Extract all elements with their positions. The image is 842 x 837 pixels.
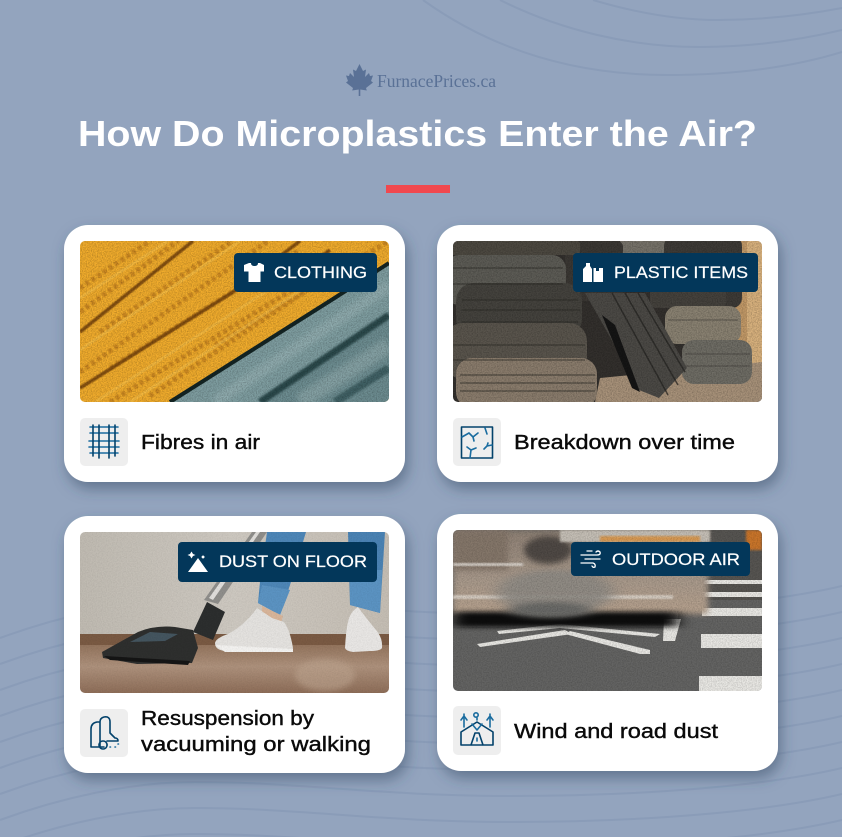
logo	[346, 64, 496, 96]
badge: plastic items: PLASTIC ITEMS	[614, 264, 748, 282]
photo: blurred car on road	[453, 530, 762, 691]
photo: knitted fabric	[80, 241, 389, 402]
badge: clothing: CLOTHING	[274, 264, 367, 282]
icon: maple leaf	[346, 64, 373, 96]
card background	[64, 516, 405, 773]
icon: bottle and bag	[583, 263, 603, 282]
badge: dust on floor	[178, 542, 377, 582]
icon box: vacuum cleaner	[80, 709, 128, 757]
icon box: woven fibres	[80, 418, 128, 466]
card background	[437, 225, 778, 482]
panel: dust on floor	[64, 516, 405, 773]
card background	[64, 225, 405, 482]
photo: vacuuming floor	[80, 532, 389, 693]
badge: dust on floor: DUST ON FLOOR	[219, 553, 367, 571]
icon box: road and trees	[453, 706, 501, 755]
label: Fibres in air	[141, 432, 260, 454]
icon box: cracked surface	[453, 418, 501, 466]
card background	[437, 514, 778, 771]
panel: clothing	[64, 225, 405, 482]
label: Wind and road dust	[514, 721, 719, 743]
icon: dust pile with sparkles	[188, 552, 208, 572]
label: Breakdown over time	[514, 432, 735, 454]
panel: plastic items	[437, 225, 778, 482]
title: How Do Microplastics Enter the Air?	[78, 113, 757, 154]
photo: old tires	[445, 236, 762, 408]
logo: FurnacePrices.ca	[377, 71, 496, 91]
label: Resuspension by	[141, 708, 314, 730]
icon: t-shirt	[244, 263, 264, 282]
red accent bar	[386, 185, 450, 193]
badge: outdoor air: OUTDOOR AIR	[612, 551, 740, 569]
badge: outdoor air	[571, 542, 750, 576]
label: vacuuming or walking	[141, 734, 371, 756]
badge: plastic items	[573, 253, 758, 292]
panel: outdoor air	[437, 514, 778, 771]
icon: wind	[581, 551, 600, 567]
badge: clothing	[234, 253, 377, 292]
label	[141, 708, 371, 756]
